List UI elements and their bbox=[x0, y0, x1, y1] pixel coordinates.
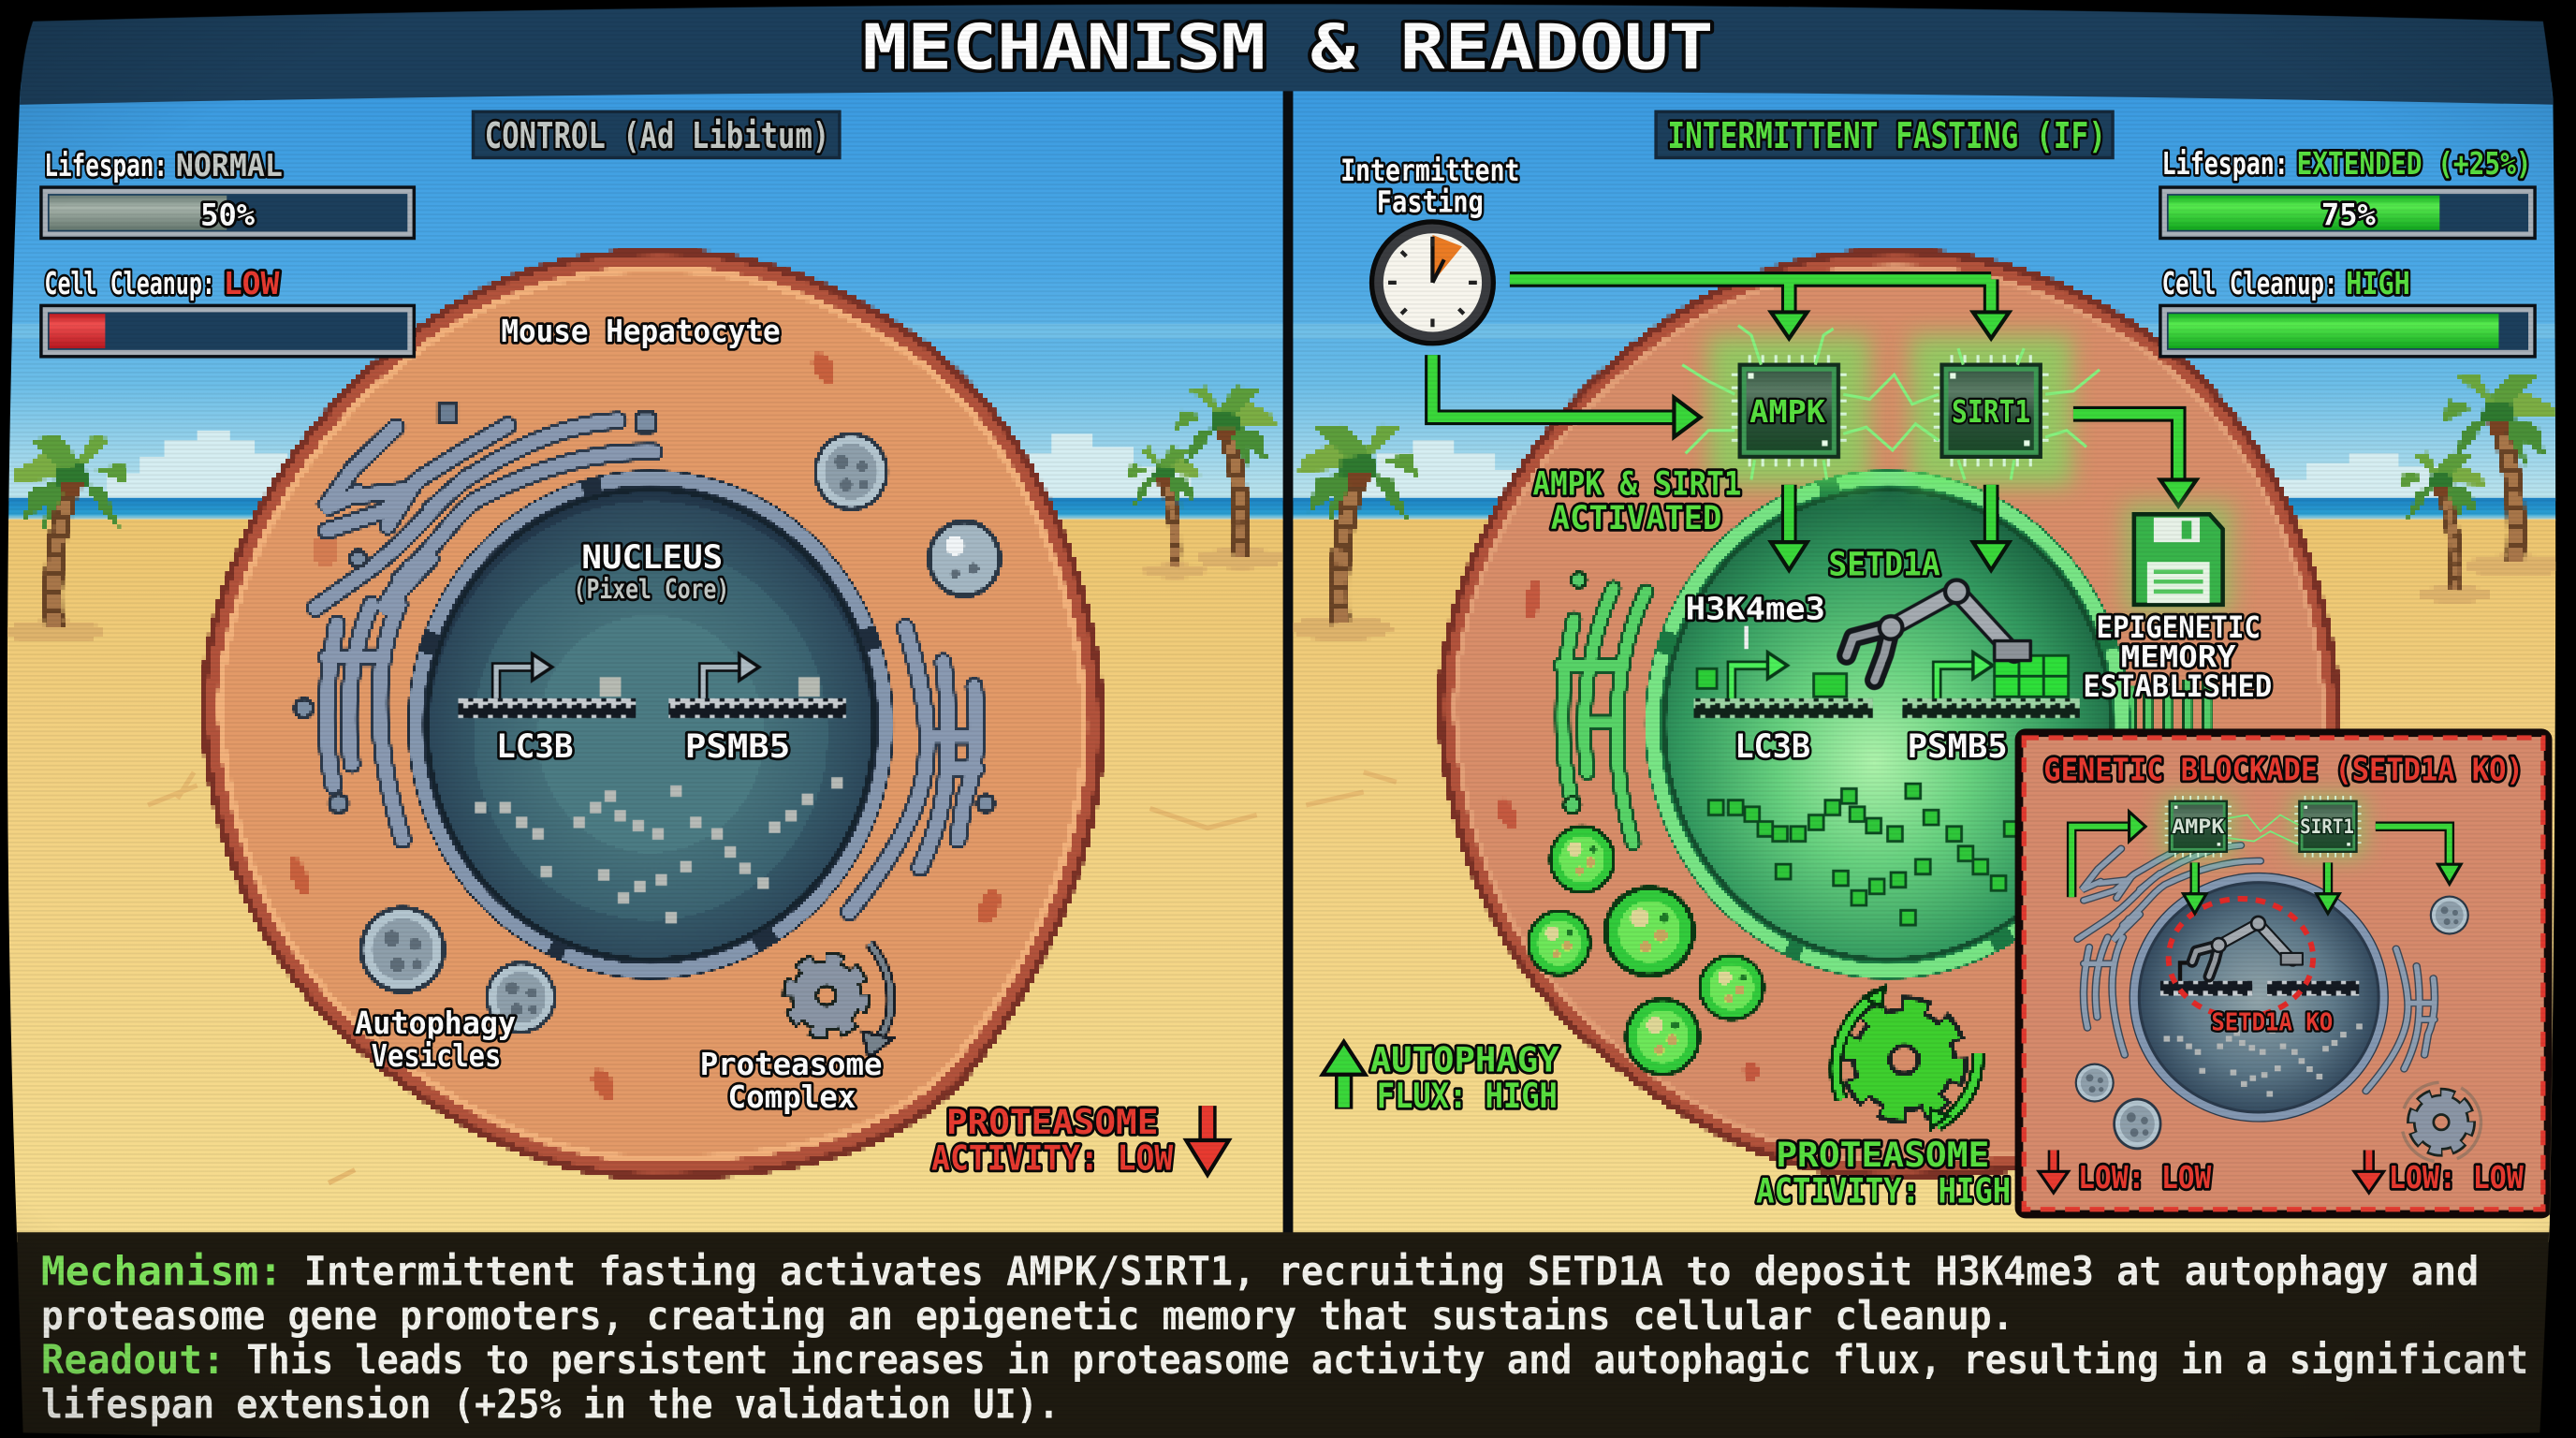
callout: proteasome activity high bbox=[1756, 1135, 2011, 1211]
control cell body bbox=[200, 248, 1105, 1180]
readout text bbox=[41, 1337, 2528, 1429]
chip: SIRT1: SIRT1 bbox=[1952, 393, 2030, 430]
callout: proteasome activity high: ACTIVITY: HIGH bbox=[1756, 1171, 2011, 1211]
arrow: clock to AMPK and SIRT1 bbox=[1510, 279, 2009, 339]
H3K4me3 mark grid bbox=[1995, 655, 2069, 697]
chip: AMPK bbox=[1708, 335, 1869, 486]
cell labels: control: Autophagy bbox=[355, 1005, 516, 1041]
HUD: control lifespan: 50% bbox=[200, 198, 255, 232]
HUD: fasting lifespan: EXTENDED (+25%) bbox=[2297, 145, 2532, 182]
cell labels: fasting: H3K4me3 bbox=[1686, 591, 1825, 627]
fasting cell body bbox=[1437, 248, 2342, 1180]
energy sparks between chips bbox=[1682, 325, 2100, 479]
vesicle: lower left bbox=[359, 905, 446, 994]
callout: proteasome activity high: PROTEASOME bbox=[1776, 1135, 1989, 1175]
cell labels: control: Complex bbox=[728, 1078, 856, 1115]
inset ER bbox=[2078, 845, 2435, 1091]
callout: proteasome activity low: PROTEASOME bbox=[946, 1102, 1158, 1142]
cell labels: control: (Pixel Core) bbox=[574, 574, 729, 605]
palm tree: control left bbox=[5, 435, 127, 643]
cell labels: control: NUCLEUS bbox=[581, 538, 723, 577]
proteasome gear bbox=[792, 943, 892, 1058]
inset chip SIRT1: SIRT1 bbox=[2300, 814, 2354, 838]
panel: intermittent fasting background bbox=[1293, 82, 2576, 1242]
cell labels: fasting: Fasting bbox=[1377, 185, 1484, 219]
HUD: fasting lifespan bbox=[2160, 145, 2535, 238]
inset chip SIRT1 bbox=[2291, 795, 2364, 858]
cell labels: fasting: PSMB5 bbox=[1908, 727, 2008, 766]
arrow: SIRT1 to memory bbox=[2073, 414, 2197, 506]
HUD: fasting lifespan: 75% bbox=[2321, 198, 2376, 232]
inset vesicles bbox=[2075, 895, 2469, 1150]
gene track: LC3B bbox=[459, 654, 636, 718]
endoplasmic reticulum bbox=[295, 404, 994, 912]
proteasome gear: active bbox=[1836, 988, 1978, 1129]
cell labels: fasting: SETD1A bbox=[1828, 545, 1940, 583]
readout text: Readout: bbox=[41, 1337, 225, 1384]
cell labels: control: LC3B bbox=[496, 727, 574, 766]
inset chip AMPK: AMPK bbox=[2172, 814, 2225, 838]
gene track: LC3B active bbox=[1693, 653, 1873, 718]
cell labels: fasting: ESTABLISHED bbox=[2083, 670, 2272, 704]
cell labels: fasting: Intermittent bbox=[1340, 154, 1519, 188]
inset arrows bbox=[2071, 812, 2461, 914]
HUD: fasting cell cleanup: HIGH bbox=[2346, 265, 2410, 301]
chip: SIRT1 bbox=[1910, 335, 2071, 486]
cell labels: fasting: AMPK & SIRT1 bbox=[1532, 464, 1741, 503]
callout: proteasome activity low bbox=[931, 1102, 1229, 1179]
inset labels: LOW: LOW bbox=[2389, 1159, 2525, 1196]
coarse pixel layer: palms and cell bodies bbox=[5, 248, 2564, 1180]
banner: intermittent fasting: INTERMITTENT FASTING (IF) bbox=[1667, 115, 2106, 157]
palm tree: fasting left bbox=[1288, 424, 1417, 640]
cell labels: fasting: MEMORY bbox=[2121, 641, 2236, 675]
nucleus bbox=[407, 470, 894, 979]
HUD: control lifespan: Lifespan: bbox=[44, 147, 168, 183]
cell labels: control: Proteasome bbox=[700, 1046, 883, 1082]
inset labels: SETD1A KO bbox=[2211, 1007, 2333, 1035]
HUD: control cell cleanup: Cell Cleanup: bbox=[44, 265, 215, 301]
callout: autophagy flux high bbox=[1323, 1039, 1559, 1116]
inset sparks bbox=[2228, 814, 2298, 844]
green endoplasmic reticulum bbox=[1560, 573, 2208, 843]
HUD: fasting cell cleanup bbox=[2160, 265, 2535, 357]
callout: proteasome activity low: ACTIVITY: LOW bbox=[931, 1138, 1174, 1179]
vesicle: lower middle bbox=[485, 961, 556, 1034]
inset labels bbox=[2039, 752, 2525, 1196]
cell labels: control: Mouse Hepatocyte bbox=[501, 313, 781, 349]
mechanism text bbox=[41, 1248, 2479, 1340]
HUD: fasting lifespan: Lifespan: bbox=[2162, 145, 2289, 182]
arrow: clock to AMPK side bbox=[1432, 355, 1701, 437]
banner: control: CONTROL (Ad Libitum) bbox=[485, 115, 829, 157]
inset nucleus bbox=[2130, 873, 2389, 1123]
mechanism text: Mechanism: bbox=[41, 1248, 283, 1295]
mechanism text: Intermittent fasting activates AMPK/SIRT1, recruiting SETD1A to deposit H3K4me3 at autophagy and bbox=[304, 1248, 2479, 1295]
title bar bbox=[0, 0, 2576, 105]
cell labels: fasting: LC3B bbox=[1734, 727, 1810, 766]
cell labels: control: Vesicles bbox=[372, 1037, 501, 1074]
SETD1A robot arm bbox=[1847, 580, 2030, 681]
inset gear bbox=[2402, 1082, 2481, 1162]
chip: AMPK: AMPK bbox=[1749, 393, 1825, 430]
cell labels: control bbox=[355, 313, 883, 1115]
title: MECHANISM & READOUT bbox=[862, 11, 1714, 84]
vesicle: right bbox=[927, 520, 1002, 598]
clock: intermittent fasting bbox=[1372, 222, 1493, 344]
chromatin dots: fasting bbox=[1708, 784, 2019, 925]
palm tree: control right small bbox=[1129, 447, 1207, 579]
palm tree: control right large bbox=[1176, 386, 1284, 569]
cell labels: fasting bbox=[1340, 154, 2272, 766]
readout text: lifespan extension (+25% in the validation UI). bbox=[41, 1382, 1060, 1429]
inset: genetic blockade bbox=[2019, 733, 2548, 1214]
HUD: fasting cell cleanup: Cell Cleanup: bbox=[2162, 265, 2337, 301]
palm tree: fasting right small bbox=[2401, 452, 2491, 603]
inset chip AMPK bbox=[2162, 795, 2234, 858]
autophagy vesicles: active bbox=[1527, 825, 1765, 1077]
chromatin dots: control bbox=[475, 777, 842, 923]
inset labels: GENETIC BLOCKADE (SETD1A KO) bbox=[2043, 752, 2524, 788]
palm tree: fasting right large bbox=[2443, 373, 2564, 577]
gene track: PSMB5 active bbox=[1902, 653, 2080, 718]
callout: autophagy flux high: FLUX: HIGH bbox=[1377, 1076, 1558, 1116]
HUD: control cell cleanup: LOW bbox=[224, 265, 280, 301]
HUD: control lifespan: NORMAL bbox=[176, 147, 283, 183]
arrow: AMPK to nucleus bbox=[1771, 485, 1808, 570]
icon: floppy disk bbox=[2124, 503, 2232, 614]
HUD: control lifespan bbox=[41, 147, 414, 238]
tick from H3K4me3 bbox=[1745, 626, 1748, 649]
inset labels: LOW: LOW bbox=[2078, 1159, 2212, 1196]
mechanism text: proteasome gene promoters, creating an epigenetic memory that sustains cellular cleanup. bbox=[41, 1293, 2014, 1340]
arrow: SIRT1 to nucleus bbox=[1973, 485, 2009, 570]
cell labels: fasting: EPIGENETIC bbox=[2096, 611, 2261, 645]
panel divider bbox=[1283, 82, 1293, 1240]
footer panel bbox=[0, 1232, 2576, 1438]
vesicle: upper bbox=[813, 433, 888, 511]
active nucleus bbox=[1645, 470, 2130, 979]
gene track: PSMB5 bbox=[668, 654, 846, 718]
HUD: control cell cleanup bbox=[41, 265, 414, 357]
fine pixel layer: organelles bbox=[295, 404, 2208, 1129]
cell labels: control: PSMB5 bbox=[685, 727, 790, 766]
callout: autophagy flux high: AUTOPHAGY bbox=[1370, 1039, 1559, 1079]
cell labels: fasting: ACTIVATED bbox=[1551, 499, 1721, 537]
panel: control background bbox=[0, 82, 1283, 1242]
